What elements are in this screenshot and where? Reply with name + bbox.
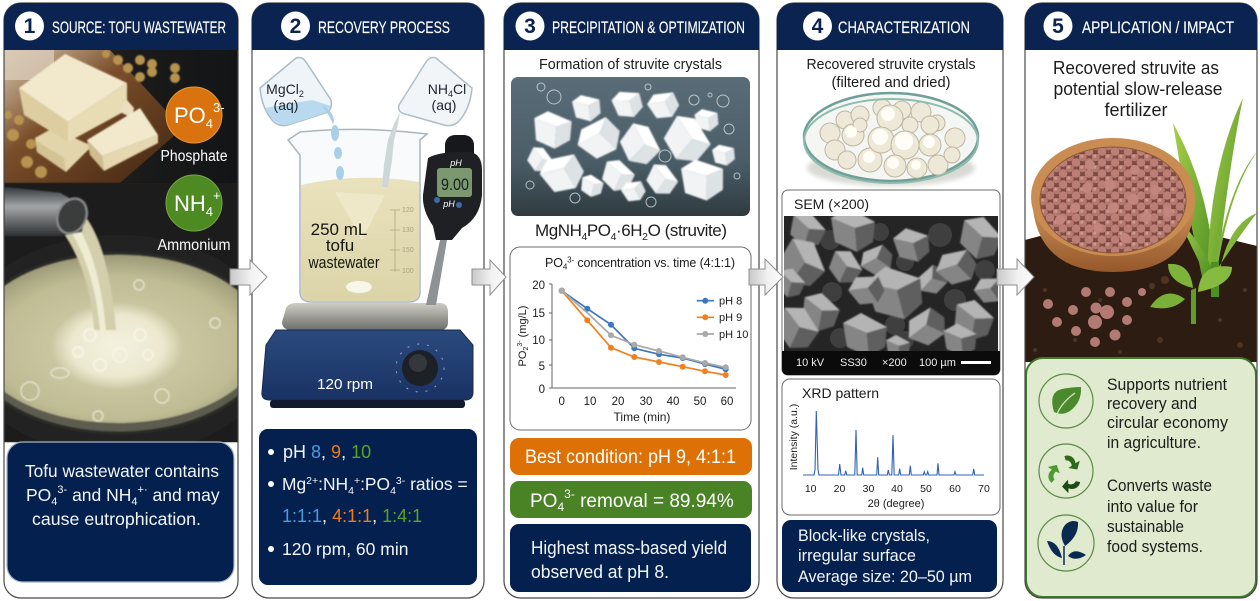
line chart: 5	[539, 361, 545, 373]
chart legend: pH 10	[719, 329, 748, 341]
benefit text: waste to value	[1107, 477, 1212, 556]
benefit text: waste to value: food systems.	[1107, 538, 1203, 556]
PO4 phosphate badge: PO	[174, 103, 206, 128]
XRD chart card: 60	[949, 483, 961, 495]
line chart: 0	[558, 396, 565, 408]
fertilizer caption	[1053, 58, 1222, 120]
NH4Cl pouring beaker	[399, 58, 472, 126]
struvite formula: O (struvite)	[648, 221, 727, 240]
NH4 ammonium badge: +	[213, 188, 221, 203]
fertilizer caption: fertilizer	[1104, 100, 1168, 120]
panel 2 header: RECOVERY PROCESS	[318, 19, 450, 37]
line chart: 10	[584, 396, 596, 408]
crystal size note box: Block-like crystals,	[798, 527, 930, 545]
line chart: PO	[517, 351, 529, 366]
SEM micrograph	[784, 216, 998, 351]
panel 3 header	[504, 3, 759, 50]
dried crystals caption: Recovered struvite crystals	[806, 57, 976, 73]
panel 1 border and header: SOURCE: TOFU WASTEWATER	[52, 19, 226, 37]
soil	[1026, 225, 1256, 362]
panel 4 header	[777, 3, 1003, 50]
struvite formula: ·6H	[616, 221, 643, 240]
process conditions box: pH 8, 9, 10	[283, 442, 371, 462]
panel 1 frame	[4, 3, 238, 598]
panel 5: application and impact	[1025, 3, 1257, 598]
best condition bar	[510, 438, 752, 475]
best condition bar: Best condition: pH 9, 4:1:1	[525, 447, 736, 468]
XRD chart card: 2θ (degree)	[868, 498, 924, 510]
process conditions box: 2+	[306, 475, 318, 487]
panel 1 border and header: 1	[24, 15, 36, 38]
panel 3 header: PRECIPITATION & OPTIMIZATION	[552, 19, 745, 37]
struvite formula: PO	[587, 221, 611, 240]
tofu blocks	[19, 54, 158, 172]
line chart: 20	[532, 280, 545, 292]
panel 1 description box: +·	[138, 484, 148, 496]
removal bar: removal = 89.94%	[575, 491, 734, 512]
line chart: 60	[721, 396, 733, 408]
magnetic stirrer hot plate: 120 rpm	[317, 376, 373, 393]
SEM data strip: 100 µm	[919, 357, 956, 369]
pH meter	[423, 135, 482, 305]
NH4 ammonium badge: NH	[174, 191, 206, 216]
process conditions box: 120 rpm, 60 min	[282, 539, 408, 559]
chart legend: pH 8	[719, 296, 742, 308]
pH meter: pH	[449, 158, 462, 168]
tofu and pot photo area	[4, 50, 238, 444]
struvite formula: MgNH	[535, 221, 582, 240]
panel 2: recovery process	[252, 3, 484, 598]
panel 1 description box: and NH	[67, 485, 131, 505]
benefit text: waste to value: sustainable	[1107, 518, 1184, 536]
icon: recycle	[1039, 444, 1093, 498]
series pH 10	[558, 288, 729, 370]
SEM data strip: ×200	[882, 357, 907, 369]
arrow: panel 3 to 4	[749, 259, 783, 295]
scattered pellets	[1043, 287, 1146, 347]
crystal size note box: irregular surface	[798, 547, 916, 565]
panel 3: precipitation and optimization	[504, 3, 759, 598]
panel 2 frame	[252, 3, 484, 598]
line chart: concentration vs. time (4:1:1)	[574, 256, 735, 270]
line chart: 50	[694, 396, 706, 408]
process conditions box: +	[354, 475, 360, 487]
panel 4 frame	[777, 3, 1003, 598]
XRD chart card: 30	[863, 483, 874, 495]
yield note box	[510, 524, 751, 592]
panel 5 header: 5	[1052, 15, 1064, 38]
line chart: 2	[523, 347, 530, 351]
panel 1 description box: 4	[131, 496, 138, 508]
process conditions box: :NH	[318, 474, 348, 494]
pH meter: 9.00	[441, 175, 469, 194]
panel 5 frame	[1025, 3, 1257, 598]
benefit text: waste to value: Converts waste	[1107, 477, 1212, 495]
process conditions box: Mg	[282, 474, 306, 494]
SEM data strip	[782, 351, 1000, 375]
line chart: 4	[563, 262, 568, 272]
line chart: 30	[640, 396, 652, 408]
line chart: 3-	[567, 256, 574, 264]
crystal size note box	[782, 520, 997, 592]
panel 4 header: 4	[812, 15, 824, 38]
panel 1: source tofu wastewater	[3, 2, 239, 599]
struvite formula: 4	[611, 231, 617, 243]
line chart: 0	[539, 384, 545, 396]
struvite formula: 2	[642, 231, 648, 243]
arrow: panel 4 to 5	[997, 259, 1034, 295]
fertilizer caption: potential slow-release	[1054, 79, 1222, 99]
NH4 ammonium badge: Ammonium	[158, 237, 230, 254]
NH4 ammonium badge	[158, 175, 230, 254]
process conditions box: ratios =	[405, 474, 468, 494]
series pH 9	[562, 291, 729, 378]
removal bar: PO	[530, 491, 557, 512]
graduation marks: 130	[402, 227, 414, 234]
line chart	[510, 247, 751, 430]
panel 1 border and header	[4, 3, 238, 598]
line chart: 3-	[517, 340, 524, 347]
panel 1 description box: 4	[51, 496, 57, 508]
process conditions box: :PO	[360, 474, 390, 494]
fertilizer and soil illustration	[1025, 98, 1257, 362]
panel 1 description box: PO	[26, 485, 51, 505]
line chart: PO	[545, 256, 563, 270]
process conditions box: 3-	[396, 475, 406, 487]
icon: navy leaves	[1038, 515, 1094, 571]
process conditions box: 1:1:1, 4:1:1, 1:4:1	[282, 506, 422, 526]
main beaker with wastewater: wastewater	[308, 253, 380, 272]
graduation marks	[390, 207, 414, 275]
graduation marks: 150	[402, 247, 414, 254]
yield note box: observed at pH 8.	[531, 562, 669, 582]
removal bar	[510, 481, 752, 518]
panel 2 header	[252, 3, 484, 50]
NH4Cl pouring beaker: Cl	[453, 81, 466, 97]
panel 5 header: APPLICATION / IMPACT	[1082, 19, 1234, 37]
benefit text: nutrient recovery: recovery and	[1107, 395, 1197, 413]
panel 2 header: 2	[290, 15, 301, 38]
line chart: Time (min)	[614, 410, 670, 424]
NH4Cl pouring beaker: 4	[448, 89, 453, 99]
tall plant	[1173, 98, 1257, 290]
NH4Cl pouring beaker: NH	[428, 81, 448, 97]
struvite crystal image	[511, 77, 750, 216]
XRD chart card: 20	[834, 483, 845, 495]
line chart: 10	[532, 335, 545, 347]
PO4 phosphate badge: Phosphate	[160, 148, 228, 165]
panel 3 header: 3	[524, 15, 536, 38]
petri dish with crystals	[804, 93, 978, 186]
panel 1 description box: 3-	[57, 484, 68, 496]
dried crystals caption	[806, 57, 976, 91]
fertilizer caption: Recovered struvite as	[1053, 58, 1219, 78]
icon: leaf	[1039, 374, 1093, 428]
MgCl2 pouring beaker: (aq)	[274, 97, 298, 113]
graduation marks: 100	[402, 268, 414, 275]
XRD chart card	[782, 379, 1000, 515]
struvite formula: 4	[581, 231, 587, 243]
pipe and stream	[60, 218, 116, 330]
MgCl2 pouring beaker	[260, 58, 331, 126]
process conditions box: 4	[390, 485, 396, 497]
series pH 8	[562, 291, 729, 372]
benefits box	[1026, 358, 1256, 597]
panel 1 description box: Tofu wastewater contains	[25, 461, 219, 481]
MgCl2 pouring beaker: 2	[299, 89, 304, 99]
main beaker with wastewater: 250 mL	[311, 220, 367, 239]
XRD chart card: Intensity (a.u.)	[788, 404, 800, 470]
chart legend	[697, 296, 748, 341]
process conditions box: 4	[348, 485, 354, 497]
main beaker with wastewater	[288, 105, 427, 302]
benefit text: nutrient recovery: Supports nutrient	[1107, 376, 1227, 394]
soybeans	[4, 50, 180, 178]
crystal caption: Formation of struvite crystals	[539, 57, 722, 73]
removal bar: 3-	[564, 487, 575, 501]
XRD pattern line	[803, 411, 984, 475]
panel 1 description box	[7, 442, 234, 582]
seedling	[1150, 264, 1232, 324]
benefit text: nutrient recovery	[1107, 376, 1229, 452]
line chart: 20	[612, 396, 624, 408]
panel 4: characterization	[768, 3, 1010, 598]
SEM image card	[768, 190, 1010, 375]
benefit text: waste to value: into value for	[1107, 498, 1198, 516]
panel 1 description box: and may	[148, 485, 220, 505]
pH meter: pH	[442, 199, 455, 209]
SEM data strip: 10 kV	[796, 357, 825, 369]
XRD chart card: 40	[891, 483, 903, 495]
panel 4 header: CHARACTERIZATION	[838, 19, 970, 37]
line chart: (mg/L)	[517, 306, 529, 340]
line chart: 15	[532, 308, 545, 320]
panel 1 description box: cause eutrophication.	[32, 509, 201, 529]
XRD chart card: 50	[920, 483, 932, 495]
liquid streams	[322, 105, 344, 180]
XRD chart card: 70	[978, 483, 990, 495]
graduation marks: 120	[402, 207, 414, 214]
PO4 phosphate badge: 4	[206, 116, 213, 131]
crystal size note box: Average size: 20–50 µm	[798, 568, 972, 586]
process conditions box	[259, 429, 477, 585]
benefit text: nutrient recovery: in agriculture.	[1107, 434, 1201, 452]
MgCl2 pouring beaker: MgCl	[266, 81, 299, 97]
yield note box: Highest mass-based yield	[531, 538, 727, 558]
XRD chart card: 10	[805, 483, 817, 495]
main beaker with wastewater: tofu	[326, 236, 354, 255]
NH4Cl pouring beaker: (aq)	[432, 97, 456, 113]
PO4 phosphate badge	[160, 87, 228, 165]
panel 5 header	[1025, 3, 1257, 598]
panel 3 frame	[504, 3, 759, 598]
pot with wastewater	[4, 182, 238, 444]
removal bar: 4	[557, 500, 564, 514]
bowl of fertilizer pellets	[1031, 138, 1195, 272]
dried crystals caption: (filtered and dried)	[832, 75, 950, 91]
chart legend: pH 9	[719, 312, 742, 324]
arrow: panel 1 to 2	[230, 260, 267, 295]
NH4 ammonium badge: 4	[206, 204, 213, 219]
benefit text: nutrient recovery: circular economy	[1107, 414, 1229, 432]
SEM image card: SEM (×200)	[794, 196, 869, 212]
PO4 phosphate badge: 3-	[213, 100, 225, 115]
arrow: panel 2 to 3	[472, 260, 506, 295]
line chart: 40	[667, 396, 679, 408]
SEM data strip: SS30	[840, 357, 867, 369]
magnetic stirrer hot plate	[262, 303, 473, 408]
XRD chart card: XRD pattern	[802, 385, 879, 401]
